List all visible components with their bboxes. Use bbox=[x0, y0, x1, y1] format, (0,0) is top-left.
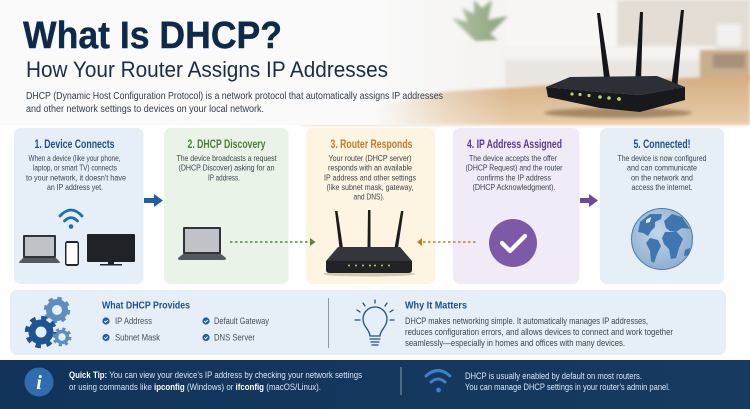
panel: step 5 connected: on the network and bbox=[631, 172, 693, 182]
panel: step 3 router responds bbox=[306, 128, 435, 284]
icon: light bulb bbox=[355, 300, 394, 345]
panel: step 5 connected: 5. Connected! bbox=[634, 139, 690, 151]
heading: why it matters: Why It Matters bbox=[405, 300, 467, 312]
icon: laptop bbox=[19, 235, 60, 263]
quick tip text bbox=[69, 370, 362, 392]
panel: step 1 device connects: 1. Device Connects bbox=[34, 139, 114, 151]
panel: step 4 IP address assigned: (DHCP Acknowledgment). bbox=[472, 182, 556, 192]
heading: what DHCP provides: What DHCP Provides bbox=[102, 300, 190, 312]
icon: info badge bbox=[24, 368, 54, 396]
panel: step 2 DHCP discovery: IP address. bbox=[208, 172, 240, 182]
header photo background bbox=[0, 0, 750, 125]
title: What Is DHCP? bbox=[23, 15, 282, 57]
checklist: Default Gateway bbox=[214, 316, 269, 326]
icon: router bbox=[323, 210, 415, 276]
panel: step 5 connected: and can communicate bbox=[627, 162, 697, 172]
panel: step 5 connected bbox=[600, 128, 724, 284]
arrow: step 4 to 5 bbox=[580, 194, 598, 207]
why it matters text: seamlessly—especially in homes and offices with many devices. bbox=[405, 338, 625, 348]
panel: step 1 device connects: to your network, it doesn't have bbox=[26, 172, 126, 182]
panel: step 3 router responds: responds with an available bbox=[328, 162, 412, 172]
panel: step 3 router responds: 3. Router Responds bbox=[330, 139, 412, 151]
panel: step 4 IP address assigned: (DHCP Request) and the router bbox=[466, 162, 563, 172]
arrow: step 1 to 2 bbox=[144, 194, 163, 207]
intro text bbox=[26, 91, 443, 115]
panel: step 1 device connects: an IP address yet. bbox=[47, 182, 103, 192]
quick tip text: Quick Tip: You can view your device's IP address by checking your network settings bbox=[69, 370, 362, 380]
checklist: IP Address bbox=[115, 316, 152, 326]
icon: phone bbox=[65, 241, 79, 266]
icon: globe bbox=[632, 208, 692, 270]
icon: television bbox=[87, 234, 135, 266]
panel: step 4 IP address assigned: confirms the IP address bbox=[477, 172, 552, 182]
arrow: dotted discover request bbox=[230, 238, 316, 246]
panel: step 4 IP address assigned bbox=[453, 128, 580, 284]
panel: step 3 router responds: IP address and other settings bbox=[324, 172, 417, 182]
arrow: dotted offer from device to router bbox=[417, 238, 478, 246]
router photo bbox=[544, 10, 692, 118]
router settings note: You can manage DHCP settings in your router's admin panel. bbox=[465, 382, 670, 392]
panel: step 2 DHCP discovery: (DHCP Discover) asking for an bbox=[178, 162, 275, 172]
panel: step 2 DHCP discovery bbox=[164, 128, 288, 284]
panel: step 4 IP address assigned: 4. IP Address Assigned bbox=[467, 139, 562, 151]
panel: step 5 connected: access the internet. bbox=[632, 182, 692, 192]
panel: what DHCP provides and why it matters bbox=[10, 290, 726, 355]
panel: step 4 IP address assigned: The device accepts the offer bbox=[469, 153, 557, 163]
icon: wifi signal bbox=[60, 210, 82, 229]
checklist: Subnet Mask bbox=[115, 332, 160, 342]
panel: step 1 device connects: When a device (like your phone, bbox=[28, 153, 120, 163]
icon: wifi bbox=[426, 370, 450, 392]
panel: footer tips bbox=[0, 360, 750, 409]
icon: purple check badge bbox=[489, 219, 537, 267]
icon: laptop bbox=[178, 227, 226, 260]
router settings note: DHCP is usually enabled by default on most routers. bbox=[465, 371, 642, 381]
panel: step 3 router responds: Your router (DHCP server) bbox=[328, 153, 412, 163]
panel: step 5 connected: The device is now configured bbox=[618, 153, 707, 163]
router settings note bbox=[465, 371, 670, 392]
icon: info badge: i bbox=[36, 372, 42, 394]
quick tip text: or using commands like ipconfig (Windows) or ifconfig (macOS/Linux). bbox=[69, 382, 321, 392]
intro text: and other network settings to devices on your local network. bbox=[26, 104, 264, 115]
panel: step 1 device connects bbox=[14, 128, 144, 284]
checklist: DNS Server bbox=[214, 332, 255, 342]
intro text: DHCP (Dynamic Host Configuration Protocol) is a network protocol that automatically assigns IP addresses bbox=[26, 91, 443, 102]
subtitle: How Your Router Assigns IP Addresses bbox=[26, 57, 388, 82]
panel: step 1 device connects: laptop, or smart TV) connects bbox=[33, 162, 117, 172]
panel: step 3 router responds: and DNS). bbox=[354, 192, 384, 202]
icon: gears bbox=[27, 298, 70, 346]
panel: step 2 DHCP discovery: The device broadcasts a request bbox=[176, 153, 277, 163]
panel: step 3 router responds: (like subnet mask, gateway, bbox=[326, 182, 414, 192]
why it matters text: reduces configuration errors, and allows devices to connect and work together bbox=[405, 327, 673, 337]
checklist bbox=[102, 316, 269, 342]
why it matters text bbox=[405, 316, 673, 348]
panel: step 2 DHCP discovery: 2. DHCP Discovery bbox=[188, 139, 266, 151]
why it matters text: DHCP makes networking simple. It automatically manages IP addresses, bbox=[405, 316, 648, 326]
